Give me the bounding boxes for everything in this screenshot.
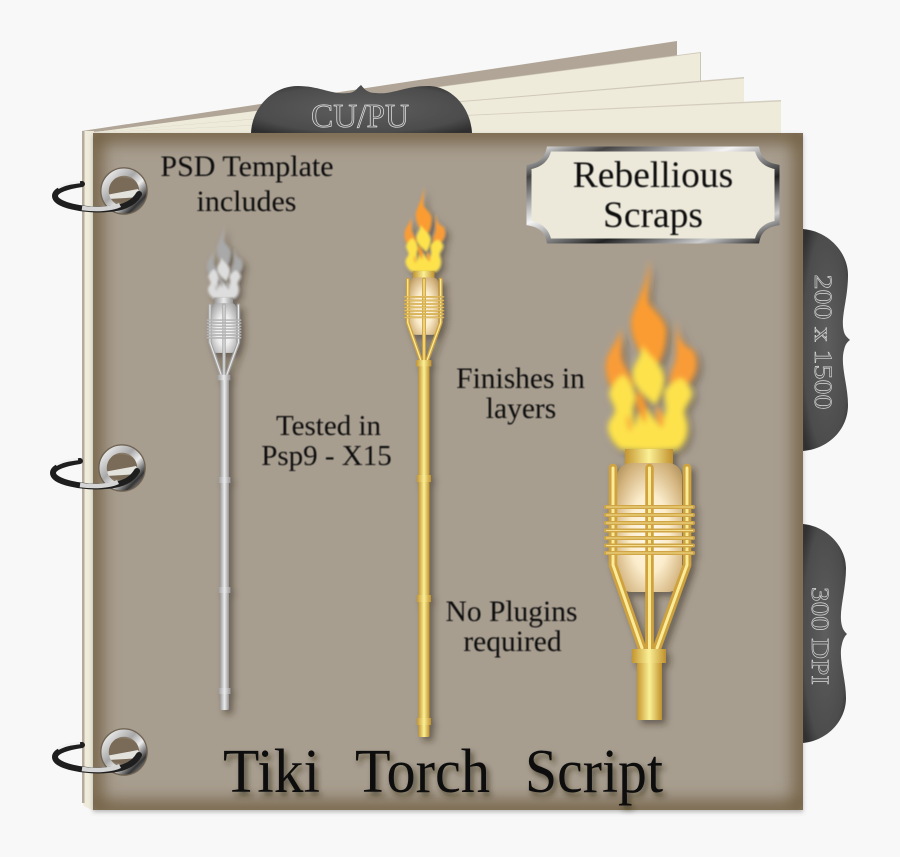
- title: Tiki: [223, 738, 320, 806]
- text: Finishes in layers: layers: [486, 393, 556, 425]
- icon: binder ring bottom: [55, 728, 148, 776]
- tab: 300 DPI: [803, 524, 847, 743]
- text: No Plugins required: required: [463, 626, 562, 658]
- tab label: CU/PU: [311, 98, 409, 135]
- tab: 200 x 1500: [803, 229, 850, 451]
- title: [223, 738, 663, 806]
- text: PSD Template includes: [160, 150, 334, 218]
- icon: binder ring middle: [53, 444, 146, 492]
- title: Torch: [355, 738, 490, 806]
- tab label: 200 x 1500: [809, 274, 836, 410]
- torch: large detail: [606, 260, 697, 720]
- book pages: [82, 41, 781, 811]
- text: No Plugins required: [446, 596, 577, 658]
- tab: CU/PU: [251, 85, 472, 135]
- title: Script: [525, 738, 663, 806]
- text: Tested in Psp9 - X15: Psp9 - X15: [261, 440, 392, 472]
- text: Finishes in layers: Finishes in: [456, 363, 585, 395]
- tab label: 300 DPI: [806, 587, 833, 685]
- torch: gold finished: [404, 187, 445, 737]
- text: Tested in Psp9 - X15: Tested in: [276, 410, 382, 442]
- text: Tested in Psp9 - X15: [261, 410, 392, 472]
- plaque: Rebellious Scraps: [529, 149, 777, 241]
- text: No Plugins required: No Plugins: [446, 596, 577, 628]
- book cover: [93, 133, 803, 810]
- text: Finishes in layers: [456, 363, 585, 425]
- icon: binder ring top: [55, 167, 148, 215]
- plaque text: Rebellious: [573, 155, 733, 196]
- text: PSD Template includes: PSD Template: [160, 150, 334, 183]
- text: PSD Template includes: includes: [197, 185, 296, 218]
- torch: silver template: [207, 225, 242, 710]
- plaque: Rebellious Scraps: Scraps: [603, 195, 703, 236]
